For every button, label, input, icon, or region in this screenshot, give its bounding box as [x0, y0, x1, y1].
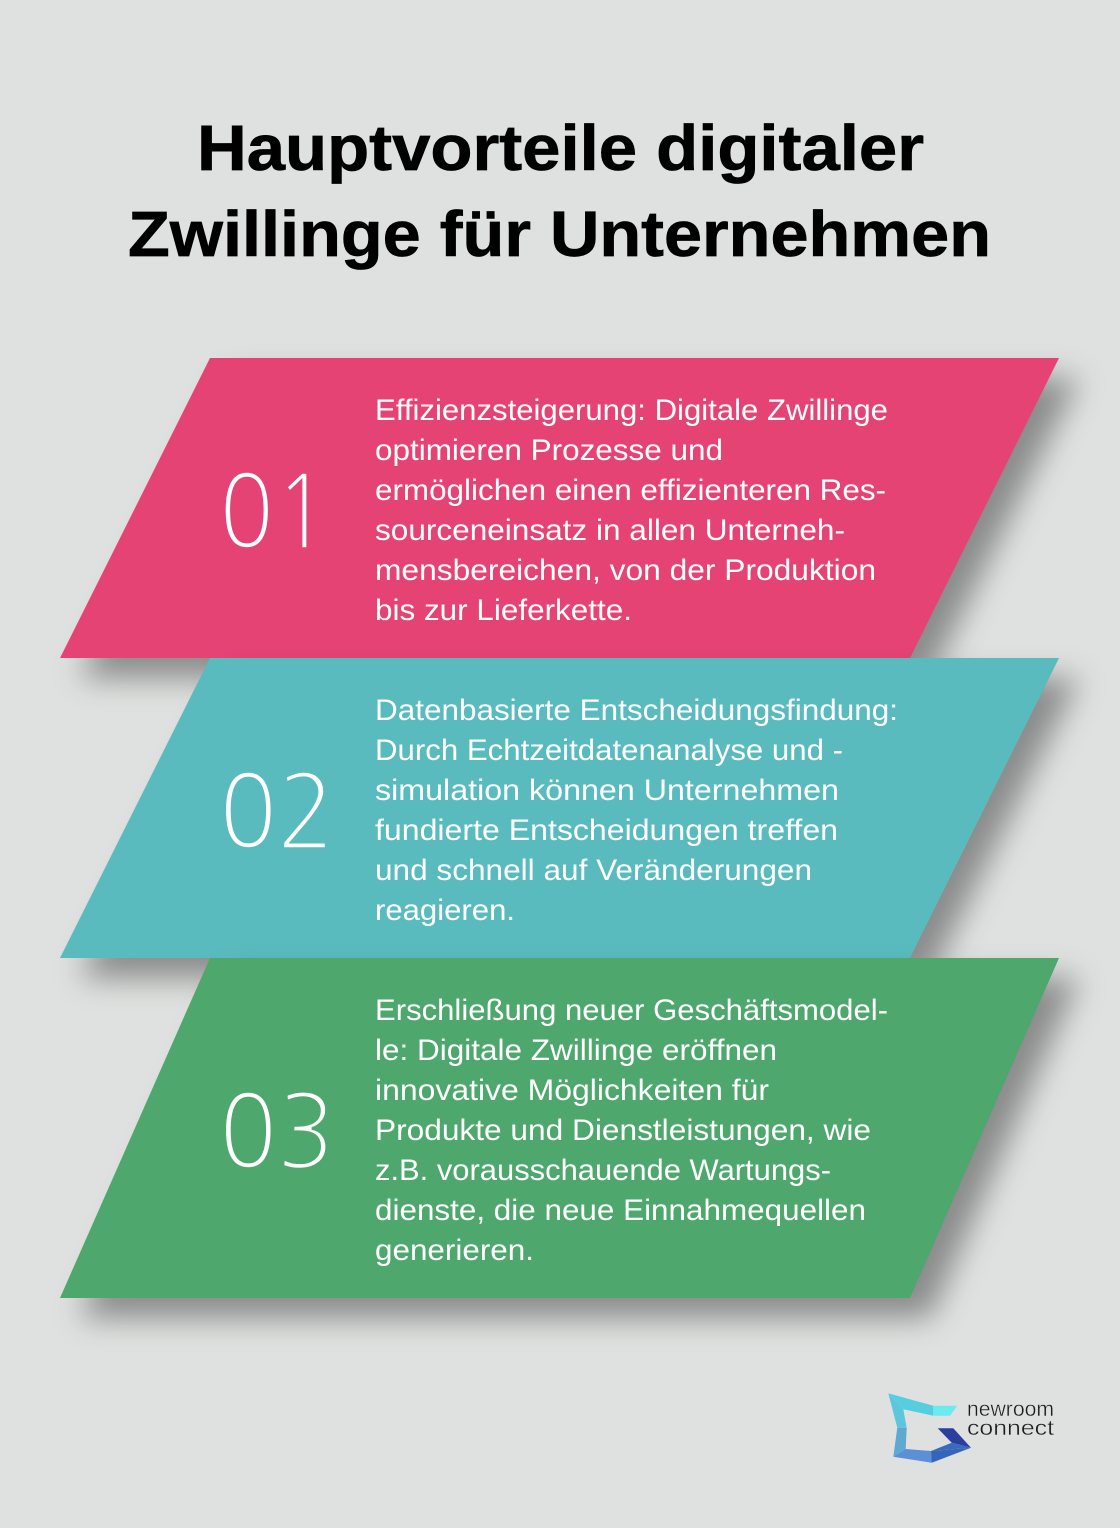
text block 03: le: Digitale Zwillinge eröffnen	[375, 1034, 777, 1067]
text block 03: generieren.	[375, 1234, 534, 1267]
text block 03: Produkte und Dienstleistungen, wie	[375, 1114, 871, 1147]
text block 03: Erschließung neuer Geschäftsmodel-	[375, 994, 888, 1027]
text block 02: Datenbasierte Entscheidungsfindung:	[375, 694, 898, 727]
text block 02: fundierte Entscheidungen treffen	[375, 814, 838, 847]
text block 02: reagieren.	[375, 894, 515, 927]
text block 03: z.B. vorausschauende Wartungs-	[375, 1154, 831, 1187]
panel: 03 Erschließung neuer Geschäftsmodelle	[60, 958, 1079, 1318]
logo wordmark: newroom	[967, 1398, 1054, 1421]
text block 03	[375, 994, 888, 1267]
text block 01: optimieren Prozesse und	[375, 434, 723, 467]
number 01: 01	[219, 461, 329, 563]
title: Hauptvorteile digitaler	[197, 112, 924, 184]
text block 01: ermöglichen einen effizienteren Res-	[375, 474, 886, 507]
title: Zwillinge für Unternehmen	[128, 198, 991, 270]
text block 01: Effizienzsteigerung: Digitale Zwillinge	[375, 394, 888, 427]
number 03: 03	[219, 1081, 335, 1183]
text block 02: und schnell auf Veränderungen	[375, 854, 812, 887]
text block 02	[375, 694, 898, 927]
text block 03: innovative Möglichkeiten für	[375, 1074, 769, 1107]
text block 02: Durch Echtzeitdatenanalyse und -	[375, 734, 843, 767]
title	[128, 112, 991, 270]
logo wordmark	[967, 1398, 1054, 1440]
logo wordmark: connect	[967, 1417, 1054, 1440]
text block 03: dienste, die neue Einnahmequellen	[375, 1194, 866, 1227]
text block 01: mensbereichen, von der Produktion	[375, 554, 876, 587]
icon: logo mark	[888, 1393, 971, 1463]
number 02: 02	[219, 761, 335, 863]
logo: newroom connect	[888, 1393, 1054, 1463]
text block 02: simulation können Unternehmen	[375, 774, 839, 807]
text block 01	[375, 394, 888, 627]
panel: 01 Effizienzsteigerung	[60, 358, 1079, 678]
panel: 02 Datenbasierte Entscheidungsfindung	[60, 658, 1079, 978]
text block 01: sourceneinsatz in allen Unterneh-	[375, 514, 845, 547]
text block 01: bis zur Lieferkette.	[375, 594, 632, 627]
